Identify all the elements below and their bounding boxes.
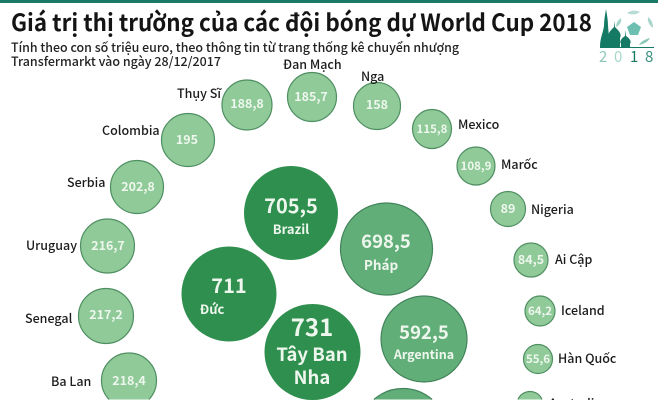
bubble: Đan Mạch: 185,7 xyxy=(294,86,328,105)
bubble: Đức: Đức xyxy=(200,299,225,318)
bubble: Marốc xyxy=(457,147,538,185)
bubble: Marốc: Marốc xyxy=(501,154,538,173)
bubble: Australia xyxy=(518,392,602,400)
bubble: Ba Lan xyxy=(51,353,156,400)
icon: World Cup 2018 logo: 8 xyxy=(645,46,653,67)
title: Giá trị thị trường của các đội bóng dự World Cup 2018 xyxy=(11,4,592,38)
icon: World Cup 2018 logo xyxy=(599,9,654,67)
bubble: Tây Ban Nha xyxy=(264,304,360,400)
bubble: Nga: 158 xyxy=(366,94,388,113)
bubble: Senegal: Senegal xyxy=(25,308,73,327)
bubble: Nigeria: Nigeria xyxy=(531,199,574,218)
bubble: Thụy Sĩ xyxy=(177,80,272,130)
bubble: Nigeria xyxy=(490,192,574,226)
bubble: Ai Cập: Ai Cập xyxy=(555,249,592,268)
bubble: Argentina: Argentina xyxy=(393,344,454,363)
bubble: Colombia xyxy=(102,114,214,166)
bubble: Ai Cập: 84,5 xyxy=(518,249,544,268)
bubble: Uruguay: 216,7 xyxy=(91,235,125,254)
bubble: Tây Ban Nha: Tây Ban xyxy=(276,341,348,367)
bubble: Brazil: Brazil xyxy=(273,219,309,238)
bubble: Ai Cập xyxy=(514,243,592,277)
icon: World Cup 2018 logo: 0 xyxy=(614,46,622,67)
bubble: Iceland: 64,2 xyxy=(528,303,552,319)
bubble: Argentina xyxy=(381,296,467,382)
bubble: Serbia: 202,8 xyxy=(121,176,155,195)
bubble: Tây Ban Nha: Nha xyxy=(294,364,330,390)
bubble: Pháp: Pháp xyxy=(364,254,398,274)
bubble: Mexico xyxy=(412,110,500,148)
bubble: Nigeria: 89 xyxy=(501,198,515,217)
icon: World Cup 2018 logo: 2 xyxy=(599,46,607,67)
bubble: Hàn Quốc xyxy=(524,344,617,374)
bubble: Argentina: 592,5 xyxy=(399,319,449,345)
bubble: Iceland: Iceland xyxy=(561,300,605,319)
bubble: Brazil: 705,5 xyxy=(264,190,318,219)
bubble: Mexico: Mexico xyxy=(458,114,500,133)
bubble: Đan Mạch xyxy=(283,54,342,122)
icon: World Cup 2018 logo: 1 xyxy=(630,46,638,67)
bubble: Brazil xyxy=(244,166,338,260)
bubble: Nga: Nga xyxy=(361,66,384,85)
bubble: Colombia: 195 xyxy=(176,129,198,148)
bubble: bottom cropped xyxy=(374,389,432,400)
bubble: Serbia xyxy=(67,160,164,214)
bubble: Thụy Sĩ: Thụy Sĩ xyxy=(177,83,222,102)
bubble: Serbia: Serbia xyxy=(67,172,105,191)
bubble: Đức xyxy=(182,246,276,342)
bubble: Hàn Quốc: 55,6 xyxy=(526,351,550,367)
bubble: Ba Lan: 218,4 xyxy=(112,370,146,389)
bubble: Pháp: 698,5 xyxy=(361,228,411,254)
bubble: Đức: 711 xyxy=(211,270,247,299)
bubble: Mexico: 115,8 xyxy=(417,121,448,137)
bubble: Nga xyxy=(354,66,400,130)
subtitle xyxy=(11,37,460,70)
subtitle: Transfermarkt vào ngày 28/12/2017 xyxy=(11,51,221,70)
subtitle: Tính theo con số triệu euro, theo thông tin từ trang thống kê chuyển nhượng xyxy=(11,37,460,56)
bubble: Senegal: 217,2 xyxy=(89,304,123,323)
bubble: Uruguay: Uruguay xyxy=(26,235,77,254)
bubble: Thụy Sĩ: 188,8 xyxy=(230,93,264,112)
bubble: Colombia: Colombia xyxy=(102,120,160,139)
bubble: Iceland xyxy=(525,296,605,326)
bubble: Senegal xyxy=(25,288,134,344)
bubble: Marốc: 108,9 xyxy=(461,158,492,174)
bubble: Đan Mạch: Đan Mạch xyxy=(283,54,342,73)
bubble: Ba Lan: Ba Lan xyxy=(51,371,91,390)
bubble: Pháp xyxy=(340,203,432,295)
bubble: Tây Ban Nha: 731 xyxy=(291,308,333,343)
top band xyxy=(0,0,658,3)
bubble: Hàn Quốc: Hàn Quốc xyxy=(558,348,617,367)
bubble: Uruguay xyxy=(26,219,134,273)
